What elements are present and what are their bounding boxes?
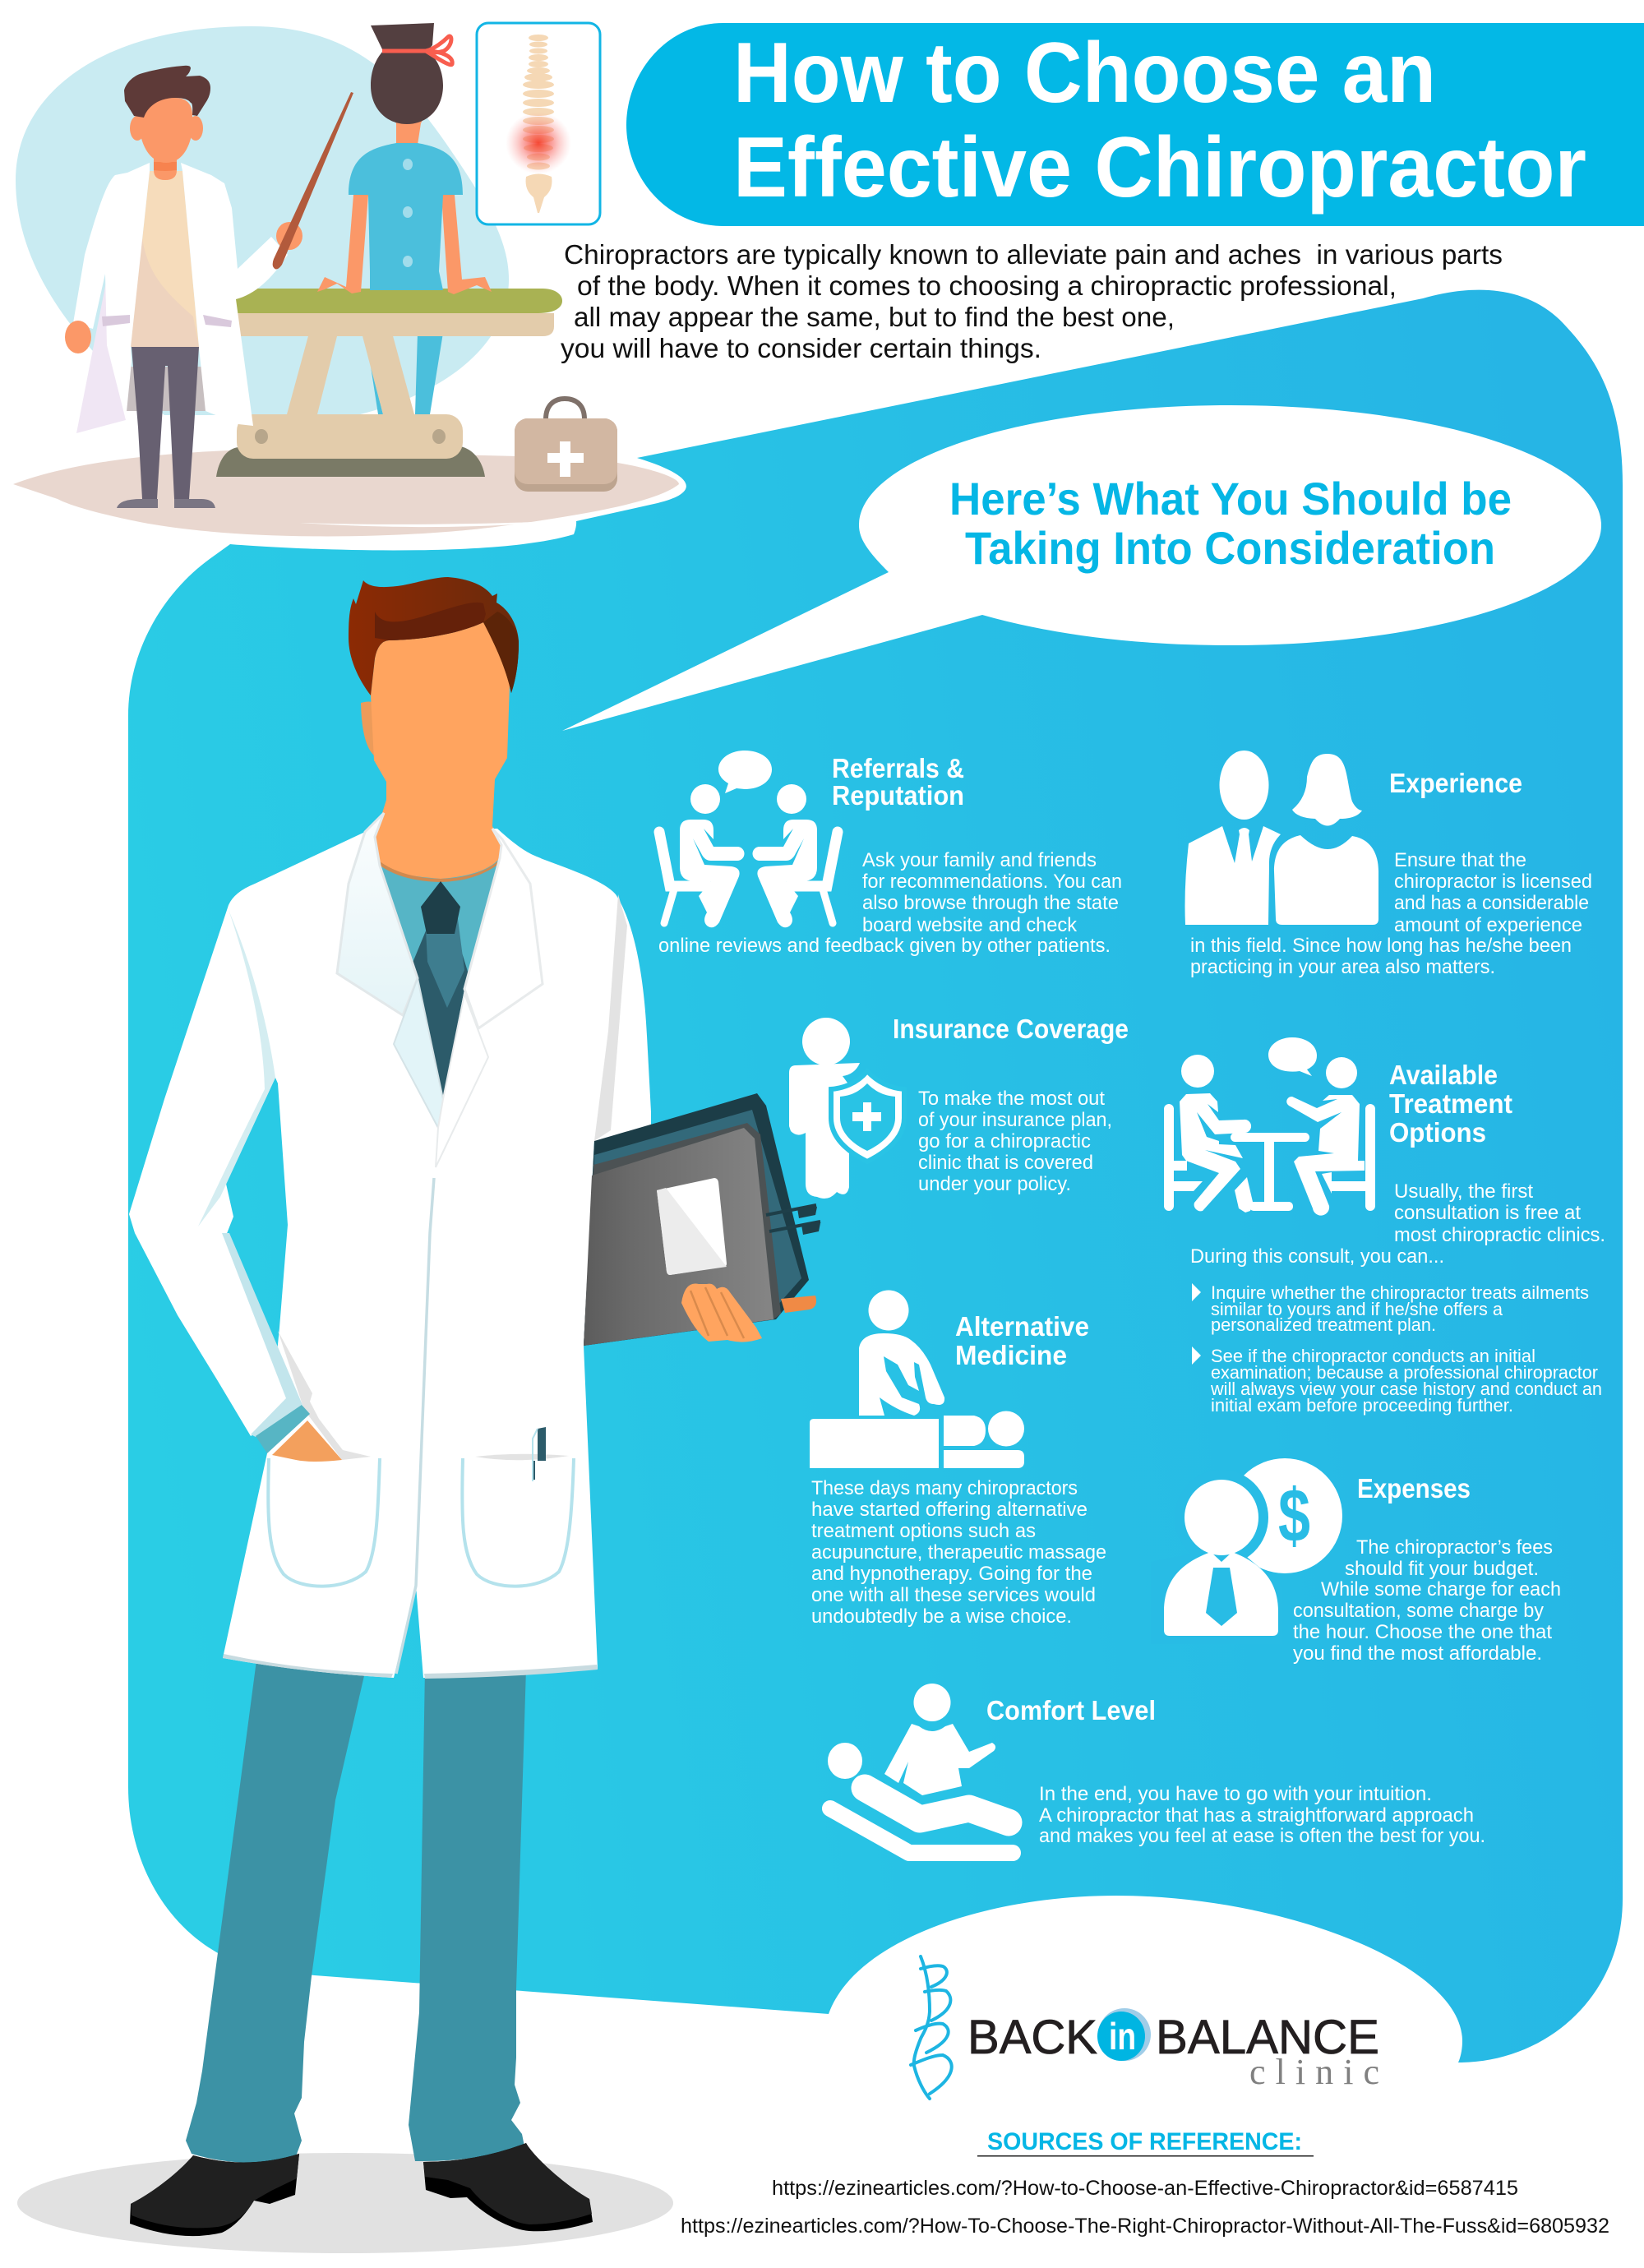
ear <box>361 702 374 755</box>
icon: man and woman <box>1185 751 1378 925</box>
heading: Alternative <box>955 1311 1089 1342</box>
body text: acupuncture, therapeutic massage <box>811 1541 1106 1564</box>
body text: consultation, some charge by <box>1293 1600 1545 1622</box>
body text <box>1190 1180 1605 1268</box>
medical bag <box>515 399 617 492</box>
body text: the hour. Choose the one that <box>1293 1621 1552 1643</box>
body text <box>811 1477 1106 1628</box>
speech bubble <box>562 405 1601 731</box>
pen <box>475 1427 569 1481</box>
necktie <box>413 881 469 1099</box>
bubble heading <box>949 473 1512 574</box>
body text: These days many chiropractors <box>811 1477 1078 1499</box>
heading: Reputation <box>832 780 964 811</box>
body text: also browse through the state <box>862 892 1119 914</box>
bullet 2: will always view your case history and conduct an <box>1210 1379 1602 1399</box>
body text <box>1039 1783 1485 1847</box>
intro paragraph: you will have to consider certain things. <box>561 333 1041 363</box>
bullet 1: personalized treatment plan. <box>1211 1314 1436 1335</box>
top illustration: chiropractor and patient <box>13 23 679 536</box>
patient <box>317 23 492 294</box>
trousers <box>186 1661 526 2163</box>
logo in-circle: in <box>1109 2015 1136 2058</box>
small doctor <box>65 66 353 508</box>
body text: amount of experience <box>1394 914 1582 936</box>
title banner <box>626 23 1644 226</box>
bullet 1: similar to yours and if he/she offers a <box>1211 1299 1503 1319</box>
body text: Usually, the first <box>1394 1180 1533 1203</box>
body text: The chiropractor’s fees <box>1356 1536 1553 1559</box>
icon: consultation at table <box>1164 1037 1375 1216</box>
logo wordmark: BACK <box>967 2011 1097 2064</box>
section: available treatment options <box>1164 1037 1605 1416</box>
bullet 1: Inquire whether the chiropractor treats ailments <box>1211 1282 1589 1303</box>
heading: Treatment <box>1389 1088 1512 1119</box>
section: experience <box>1185 751 1592 978</box>
body text: under your policy. <box>918 1173 1071 1195</box>
section: alternative medicine <box>810 1291 1106 1628</box>
heading: Referrals & <box>832 753 964 783</box>
section: expenses <box>1151 1458 1561 1665</box>
bullet 2: examination; because a professional chiropractor <box>1211 1362 1598 1383</box>
body text: During this consult, you can... <box>1190 1245 1444 1268</box>
body text: and has a considerable <box>1394 892 1589 914</box>
body text: Ask your family and friends <box>862 849 1097 871</box>
logo clinic word: clinic <box>1249 2052 1379 2092</box>
source links: https://ezinearticles.com/?How-to-Choose-an-Effective-Chiropractor&id=6587415 <box>772 2177 1518 2200</box>
intro paragraph <box>561 239 1503 363</box>
body text: chiropractor is licensed <box>1394 871 1592 893</box>
heading <box>832 753 964 811</box>
body text: have started offering alternative <box>811 1499 1088 1521</box>
heading: Expenses <box>1357 1473 1471 1504</box>
body text: most chiropractic clinics. <box>1394 1224 1605 1246</box>
coat hems and seams <box>198 894 627 1679</box>
body text <box>1293 1536 1561 1665</box>
section: insurance coverage <box>789 1014 1129 1199</box>
body text: online reviews and feedback given by other patients. <box>658 935 1111 957</box>
intro paragraph: Chiropractors are typically known to alleviate pain and aches in various parts <box>564 239 1503 270</box>
ground shadow <box>17 2153 673 2253</box>
body text: go for a chiropractic <box>918 1130 1091 1152</box>
body text: Ensure that the <box>1394 849 1526 871</box>
source links <box>681 2177 1609 2238</box>
body text: of your insurance plan, <box>918 1109 1112 1131</box>
body text <box>658 849 1122 957</box>
title text: Effective Chiropractor <box>733 120 1586 215</box>
body text: treatment options such as <box>811 1520 1036 1542</box>
section: referrals and reputation <box>658 751 1122 957</box>
intro paragraph: all may appear the same, but to find the best one, <box>574 302 1175 332</box>
body text: To make the most out <box>918 1088 1105 1110</box>
body text <box>918 1088 1112 1195</box>
icon: therapist with patient <box>828 1684 1013 1853</box>
logo wordmark: BALANCE <box>1156 2011 1379 2064</box>
heading: Comfort Level <box>986 1695 1156 1725</box>
body text: in this field. Since how long has he/she been <box>1190 935 1572 957</box>
neck and face <box>371 622 510 879</box>
light blue backdrop <box>16 26 509 415</box>
lab coat <box>129 829 651 1678</box>
body text: undoubtedly be a wise choice. <box>811 1605 1072 1628</box>
sources heading: SOURCES OF REFERENCE: <box>987 2128 1302 2155</box>
main blue panel <box>128 290 1623 2062</box>
body text: A chiropractor that has a straightforward approach <box>1039 1804 1474 1827</box>
pockets <box>268 1458 574 1587</box>
heading: Experience <box>1389 768 1522 798</box>
heading: Options <box>1389 1117 1486 1148</box>
icon: person with dollar coin: $ <box>1278 1474 1310 1558</box>
shoes <box>130 2143 593 2236</box>
bubble heading: Here’s What You Should be <box>949 473 1512 524</box>
lapels <box>337 813 543 1167</box>
body text: should fit your budget. <box>1345 1558 1539 1580</box>
bullet 2: See if the chiropractor conducts an initial <box>1211 1346 1535 1366</box>
icon: person with dollar coin <box>1151 1458 1342 1644</box>
floor shape <box>13 450 679 536</box>
heading: Insurance Coverage <box>893 1014 1129 1044</box>
bullet 2: initial exam before proceeding further. <box>1211 1395 1513 1416</box>
section: comfort level <box>828 1684 1485 1853</box>
body text: and hypnotherapy. Going for the <box>811 1563 1092 1585</box>
title text <box>733 25 1586 215</box>
shirt collar area <box>380 858 501 1099</box>
spine card <box>477 23 600 224</box>
body text: for recommendations. You can <box>862 871 1122 893</box>
clipboard folder <box>584 1093 820 1346</box>
heading: Available <box>1389 1060 1498 1090</box>
body text: consultation is free at <box>1394 1202 1581 1224</box>
icon: person with shield <box>789 1018 904 1199</box>
heading <box>1389 1060 1512 1148</box>
body text: one with all these services would <box>811 1584 1096 1606</box>
body text: and makes you feel at ease is often the best for you. <box>1039 1825 1485 1847</box>
bullet 2 <box>1192 1346 1602 1416</box>
heading: Medicine <box>955 1340 1067 1370</box>
left hand in pocket <box>256 1405 342 1462</box>
heading <box>955 1311 1089 1370</box>
bullet 1 <box>1192 1282 1589 1335</box>
body text: While some charge for each <box>1321 1578 1561 1601</box>
hair <box>349 577 519 695</box>
bubble heading: Taking Into Consideration <box>965 522 1495 574</box>
body text <box>1190 849 1592 978</box>
logo: Back in Balance Clinic <box>911 1956 1379 2099</box>
logo wordmark <box>967 2011 1379 2064</box>
body text: In the end, you have to go with your intuition. <box>1039 1783 1432 1805</box>
icon: massage therapy <box>810 1291 1024 1468</box>
title text: How to Choose an <box>733 25 1436 121</box>
massage table <box>216 289 562 477</box>
body text: practicing in your area also matters. <box>1190 956 1495 978</box>
body text: board website and check <box>862 914 1078 936</box>
logo spine mark <box>911 1956 952 2099</box>
right hand <box>681 1283 816 1342</box>
body text: you find the most affordable. <box>1293 1642 1542 1665</box>
icon: two people talking <box>659 751 838 927</box>
large doctor figure <box>17 577 820 2253</box>
logo in-circle <box>1097 2008 1151 2061</box>
body text: clinic that is covered <box>918 1152 1093 1174</box>
intro paragraph: of the body. When it comes to choosing a chiropractic professional, <box>577 270 1397 301</box>
source links: https://ezinearticles.com/?How-To-Choose-The-Right-Chiropractor-Without-All-The-Fuss&id=6805932 <box>681 2215 1609 2238</box>
